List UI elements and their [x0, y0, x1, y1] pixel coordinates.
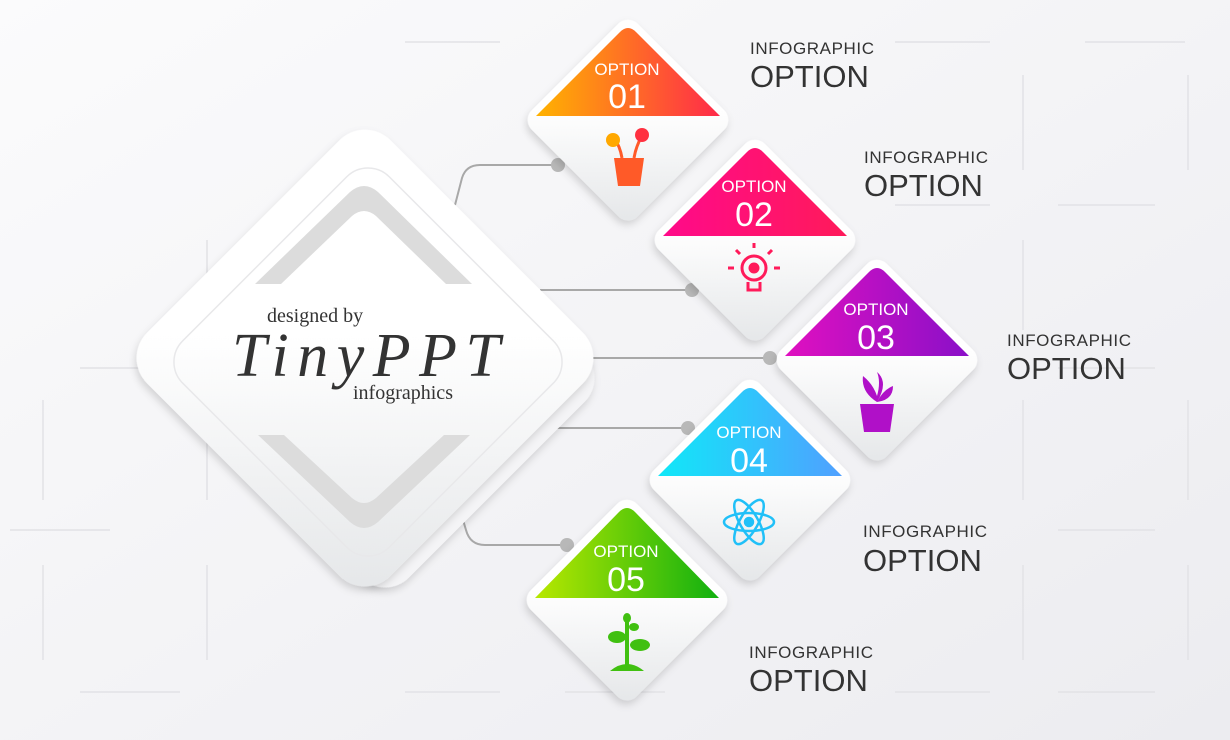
- option 2 diamond: 02: [735, 196, 773, 234]
- option 4 diamond: 04: [730, 442, 768, 480]
- label 3: [1007, 331, 1131, 386]
- icon: sprout: [608, 613, 650, 671]
- icon: lightbulb: [728, 243, 780, 290]
- logo text: TinyPPT: [232, 322, 505, 390]
- label 5: [749, 643, 873, 698]
- label 3: OPTION: [1007, 351, 1126, 386]
- label 1: INFOGRAPHIC: [750, 39, 874, 58]
- option 2 diamond: [649, 134, 861, 346]
- option 5 diamond: [521, 494, 733, 706]
- option 3 diamond: [771, 254, 983, 466]
- option 2 diamond: OPTION: [721, 177, 787, 196]
- label 2: OPTION: [864, 168, 983, 203]
- label 1: [750, 39, 874, 94]
- central logo diamond: [122, 115, 608, 601]
- option 3 diamond: 03: [857, 319, 895, 357]
- option 5 diamond: 05: [607, 561, 645, 599]
- logo text: designed by: [267, 305, 363, 327]
- label 2: INFOGRAPHIC: [864, 148, 988, 167]
- label 4: INFOGRAPHIC: [863, 522, 987, 541]
- icon: flower pot: [606, 128, 649, 186]
- label 5: OPTION: [749, 663, 868, 698]
- label 5: INFOGRAPHIC: [749, 643, 873, 662]
- option 1 diamond: OPTION: [594, 60, 660, 79]
- icon: potted plant: [860, 372, 894, 432]
- option 3 diamond: OPTION: [843, 300, 909, 319]
- label 3: INFOGRAPHIC: [1007, 331, 1131, 350]
- option 1 diamond: [522, 14, 734, 226]
- option 4 diamond: OPTION: [716, 423, 782, 442]
- icon: atom: [724, 496, 774, 548]
- logo text: infographics: [353, 382, 453, 404]
- option 4 diamond: [644, 374, 856, 586]
- label 1: OPTION: [750, 59, 869, 94]
- label 2: [864, 148, 988, 203]
- label 4: OPTION: [863, 543, 982, 578]
- connectors: [455, 158, 777, 552]
- logo text: [232, 305, 505, 404]
- label 4: [863, 522, 987, 578]
- option 5 diamond: OPTION: [593, 542, 659, 561]
- option 1 diamond: 01: [608, 78, 646, 116]
